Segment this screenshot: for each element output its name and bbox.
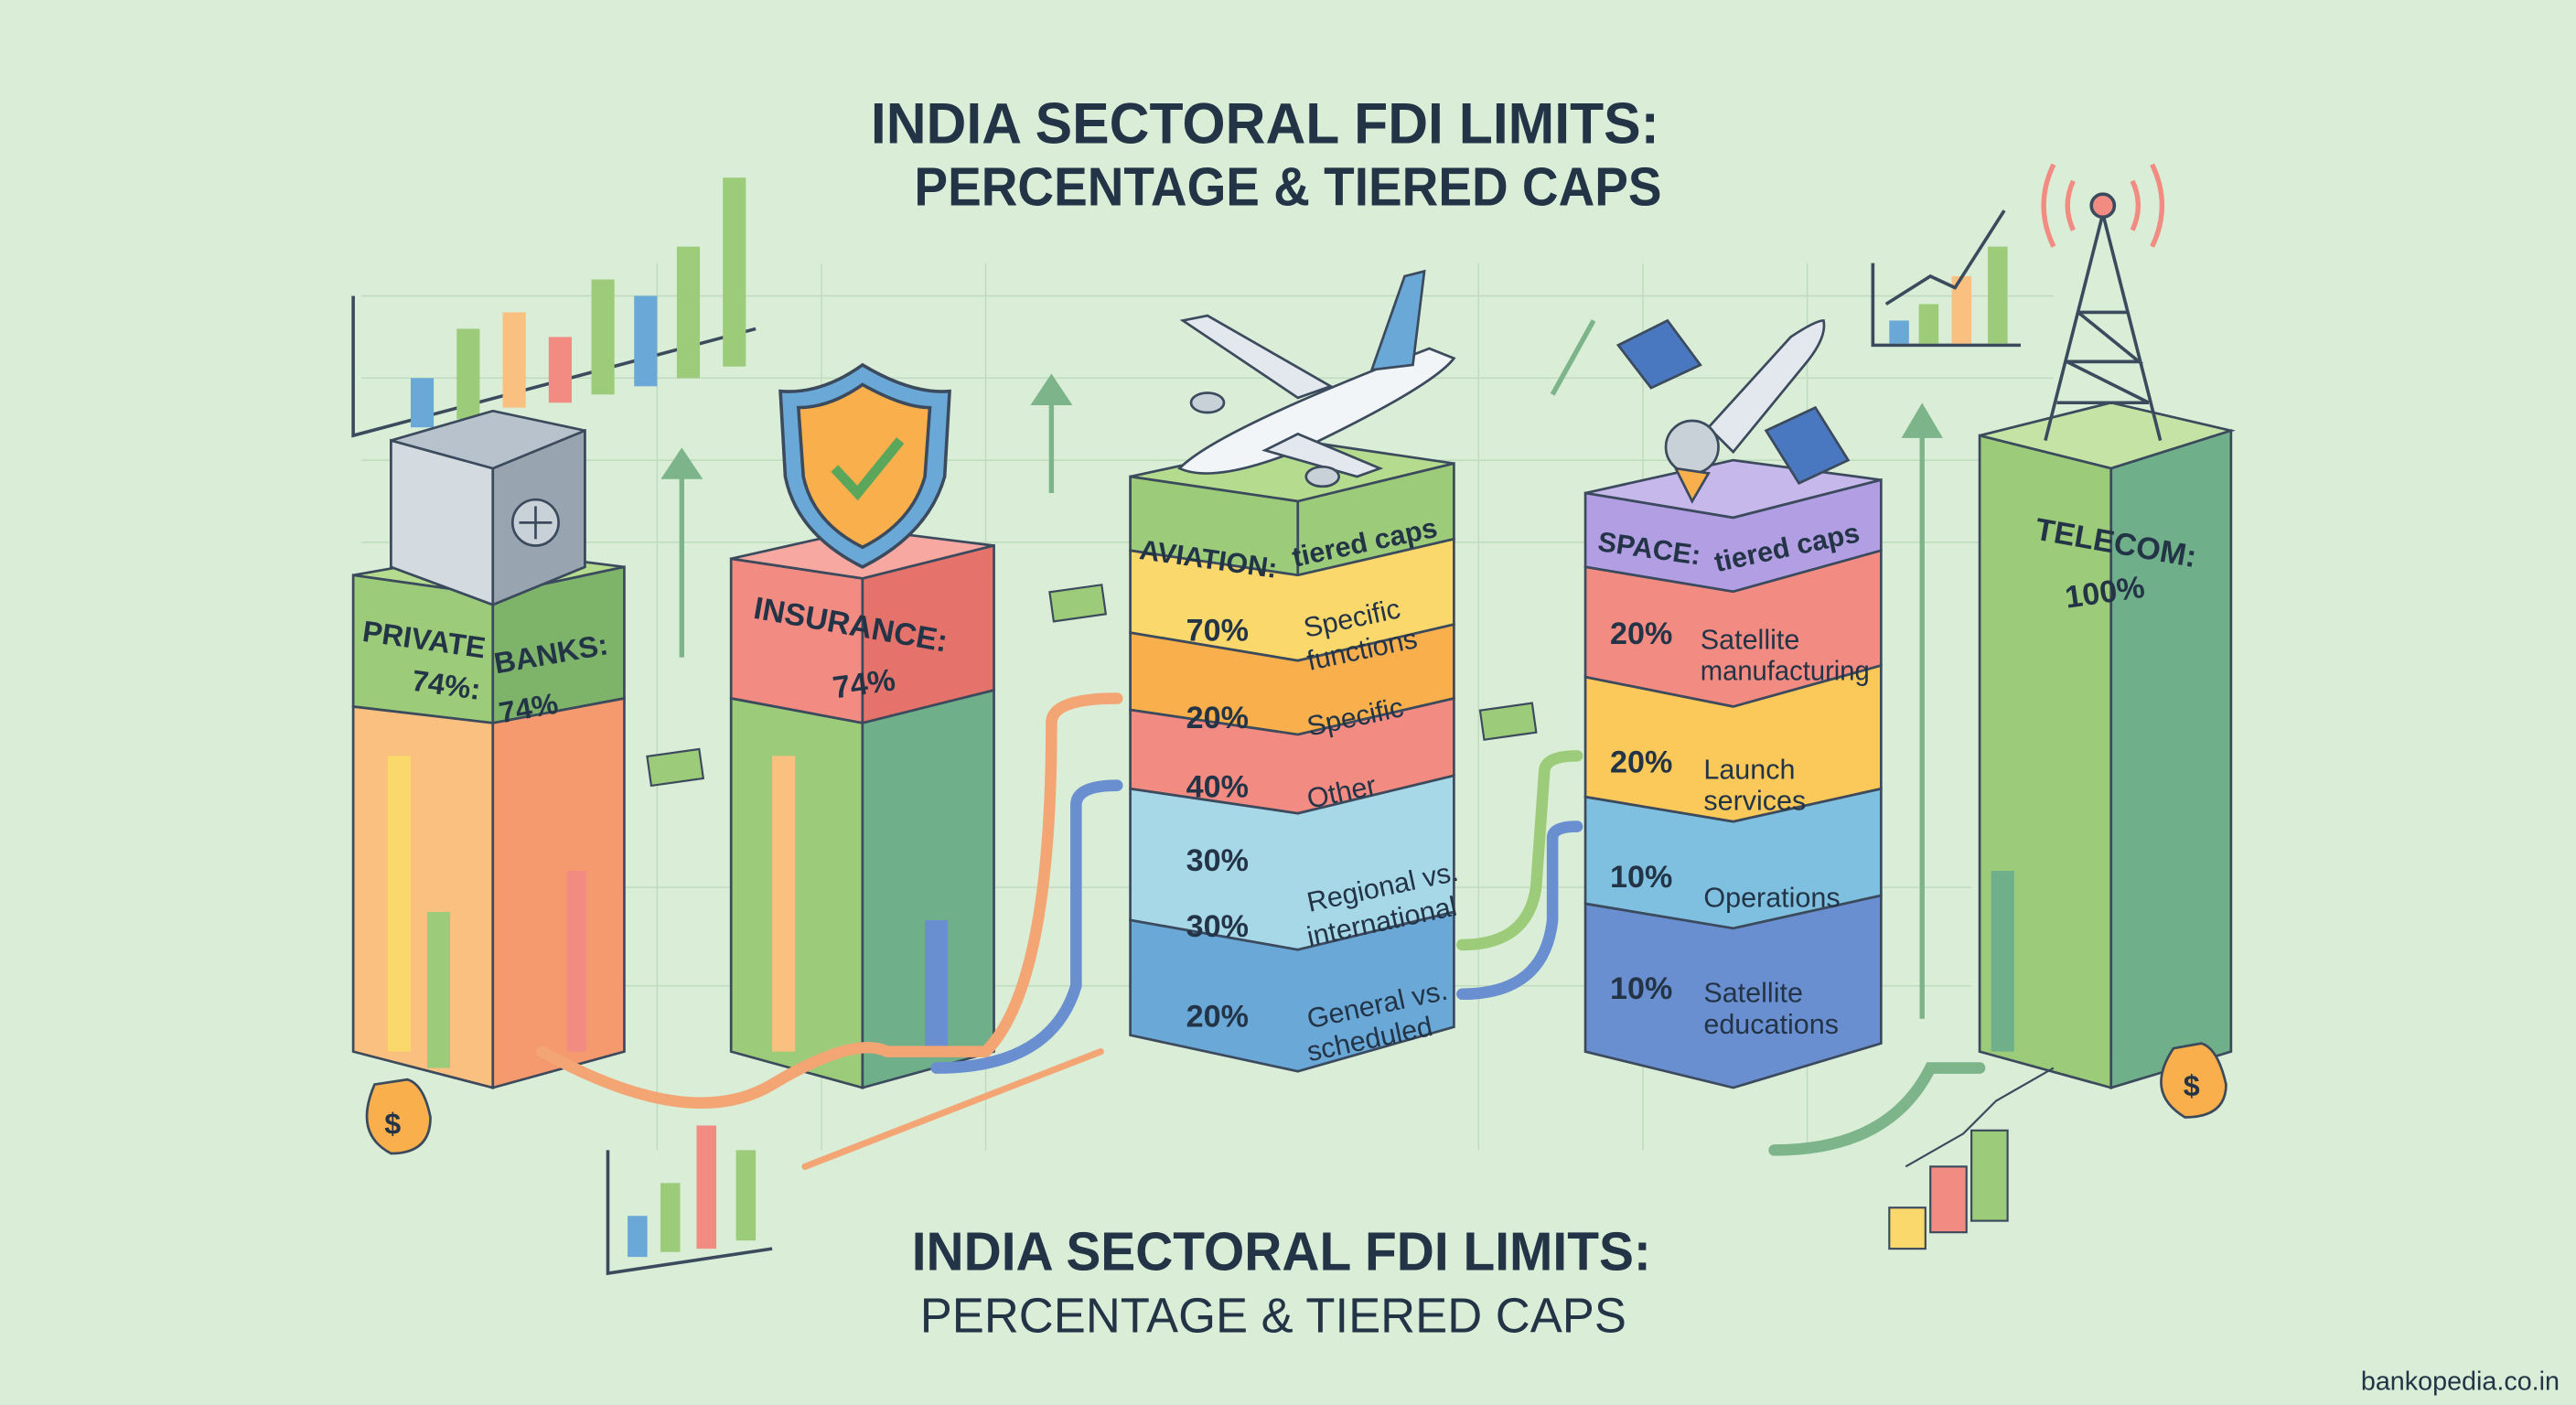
icon: money bag left — [367, 1079, 431, 1153]
label: aviation — [1138, 512, 1461, 1067]
label: aviation: General vs. — [1304, 975, 1450, 1035]
label: private banks — [360, 615, 610, 729]
label: telecom: TELECOM: — [2033, 512, 2199, 574]
label: aviation: 40% — [1186, 769, 1249, 804]
label: insurance — [751, 591, 950, 705]
bar: space — [1585, 460, 1881, 1088]
icon: money bag left: $ — [384, 1107, 401, 1140]
footer: website: bankopedia.co.in — [2361, 1367, 2560, 1397]
label: insurance: INSURANCE: — [751, 591, 950, 660]
icon: safe — [391, 411, 585, 605]
label: private banks: 74% — [497, 687, 561, 729]
label: aviation: 20% — [1186, 701, 1249, 735]
label: aviation: 70% — [1186, 614, 1249, 649]
label: private banks: BANKS: — [491, 627, 610, 680]
icon: airplane — [1179, 272, 1454, 487]
icon: shield — [780, 365, 950, 567]
label: space: educations — [1703, 1009, 1839, 1040]
label: insurance: 74% — [831, 662, 897, 705]
label: aviation: Regional vs. — [1304, 856, 1461, 918]
label: telecom: 100% — [2063, 570, 2147, 616]
bar: telecom — [1980, 402, 2231, 1088]
label: space: 20% — [1610, 745, 1672, 779]
bottom title — [912, 1220, 1651, 1344]
label: aviation: Other — [1304, 770, 1379, 815]
label: aviation: 30% — [1186, 843, 1249, 878]
icon: money bag right — [2161, 1044, 2226, 1117]
label: space: services — [1703, 786, 1806, 817]
icon: telecom tower — [2044, 165, 2162, 441]
label: aviation: international — [1304, 891, 1459, 953]
label: space — [1596, 517, 1870, 1040]
chart: top-right bar chart — [1873, 210, 2021, 345]
chart: bottom-left small bar chart — [607, 1125, 772, 1273]
label: aviation: 20% — [1186, 1000, 1249, 1035]
label: space: tiered caps — [1712, 517, 1862, 578]
label: space: Operations — [1703, 883, 1841, 914]
label: aviation: tiered caps — [1290, 512, 1440, 574]
label: space: 10% — [1610, 971, 1672, 1006]
bottom title: PERCENTAGE & TIERED CAPS — [920, 1289, 1626, 1344]
bar: private banks — [353, 551, 624, 1088]
bar: aviation — [1131, 441, 1461, 1071]
label: private banks: PRIVATE — [360, 615, 488, 664]
chart: bottom-right blocks — [1889, 1068, 2054, 1249]
label: aviation: Specific — [1301, 593, 1403, 644]
icon: money bag right: $ — [2184, 1069, 2200, 1102]
label: aviation: 30% — [1186, 909, 1249, 944]
bar: insurance — [731, 530, 994, 1088]
label: aviation: functions — [1304, 623, 1420, 677]
label: space: Satellite — [1703, 978, 1803, 1009]
label: space: Launch — [1703, 755, 1795, 786]
label: space: 20% — [1610, 617, 1672, 651]
icon: money notes — [647, 585, 1536, 786]
title — [871, 91, 1662, 218]
title: INDIA SECTORAL FDI LIMITS: — [871, 91, 1659, 156]
arrow: flow arrows — [542, 699, 1980, 1166]
label: aviation: AVIATION: — [1138, 534, 1279, 585]
label: private banks: 74%: — [410, 664, 483, 706]
label: aviation: scheduled — [1304, 1011, 1435, 1067]
label: space: SPACE: — [1596, 526, 1702, 572]
label: space: 10% — [1610, 860, 1672, 895]
bottom title: INDIA SECTORAL FDI LIMITS: — [912, 1220, 1651, 1282]
label: space: manufacturing — [1701, 656, 1870, 687]
label: aviation: Specific — [1304, 692, 1406, 743]
chart: top-left bar chart — [353, 177, 756, 435]
label: telecom — [2033, 512, 2199, 616]
arrow: up arrows — [665, 320, 1938, 1019]
label: space: Satellite — [1701, 625, 1799, 656]
title: PERCENTAGE & TIERED CAPS — [914, 156, 1662, 218]
icon: satellite rocket — [1618, 320, 1848, 501]
